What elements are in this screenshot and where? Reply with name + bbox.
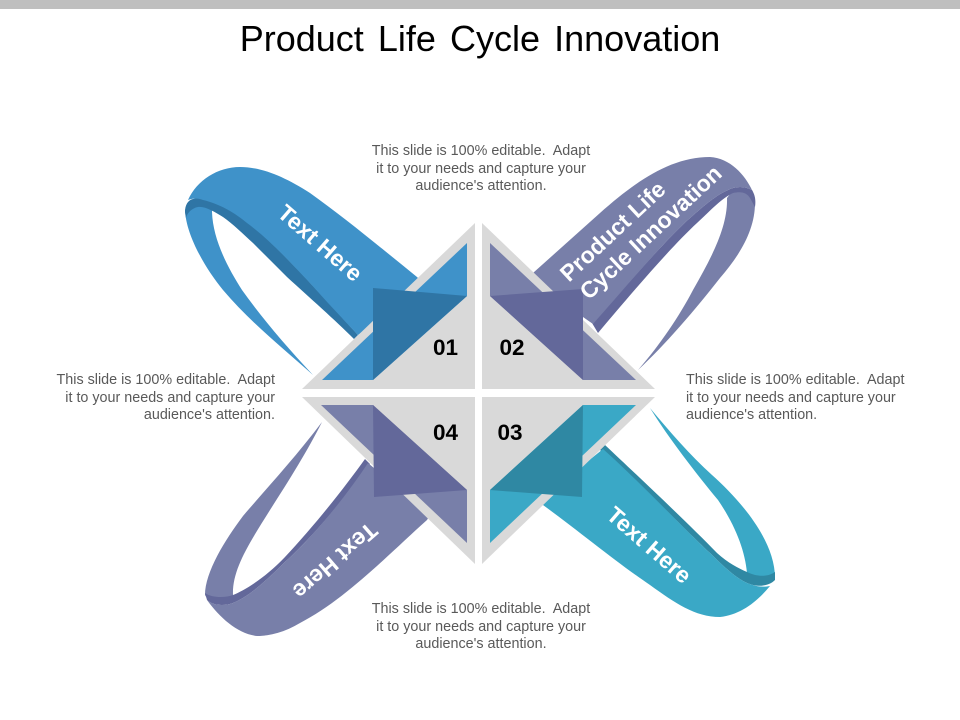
ribbon 2: purple — [530, 157, 755, 370]
grey triangle 02 — [482, 223, 655, 389]
ribbon label 3: Text Here — [602, 501, 697, 589]
grey triangle 03 — [482, 397, 655, 564]
text block left: audience's attention. — [144, 407, 275, 423]
panel 04 — [302, 397, 475, 564]
ribbon label 2: Product Life — [555, 176, 670, 286]
text block left: This slide is 100% editable. Adapt — [57, 372, 275, 388]
ribbon label 1: Text Here — [273, 199, 368, 287]
purple fold 04 — [321, 405, 467, 543]
text block right: it to your needs and capture your — [686, 390, 896, 406]
teal fold 03 — [490, 405, 636, 543]
number 03: 03 — [497, 420, 523, 445]
number 04: 04 — [433, 420, 458, 445]
grey triangle 04 — [302, 397, 475, 564]
text block bottom: it to your needs and capture your — [376, 619, 586, 635]
purple fold 02 — [490, 243, 636, 380]
text block left: it to your needs and capture your — [65, 390, 275, 406]
grey triangle 01 — [302, 223, 475, 389]
dark fold 04 — [373, 405, 467, 497]
text block top: it to your needs and capture your — [376, 161, 586, 177]
dark fold 02 — [490, 289, 583, 380]
ribbon 1: blue — [185, 167, 425, 375]
panel 01 — [302, 223, 475, 389]
text block top: This slide is 100% editable. Adapt — [372, 143, 590, 159]
ribbon 3: teal — [540, 408, 775, 617]
text block bottom: This slide is 100% editable. Adapt — [372, 601, 590, 617]
panel 02 — [482, 223, 655, 389]
ribbon label 4: Text Here — [288, 517, 383, 605]
blue fold 01 — [322, 243, 467, 380]
text block right: audience's attention. — [686, 407, 817, 423]
panel 03 — [482, 397, 655, 564]
number 01: 01 — [433, 335, 458, 360]
text block right: This slide is 100% editable. Adapt — [686, 372, 904, 388]
dark fold 03 — [490, 405, 583, 497]
ribbon label 2: Cycle Innovation — [574, 160, 727, 304]
number 02: 02 — [499, 335, 525, 360]
text block top: audience's attention. — [415, 178, 547, 194]
ribbon 4: purple — [205, 422, 430, 636]
top bar — [0, 0, 960, 9]
text block bottom: audience's attention. — [415, 636, 547, 652]
dark fold 01 — [373, 288, 467, 380]
title: Product Life Cycle Innovation — [240, 18, 720, 59]
